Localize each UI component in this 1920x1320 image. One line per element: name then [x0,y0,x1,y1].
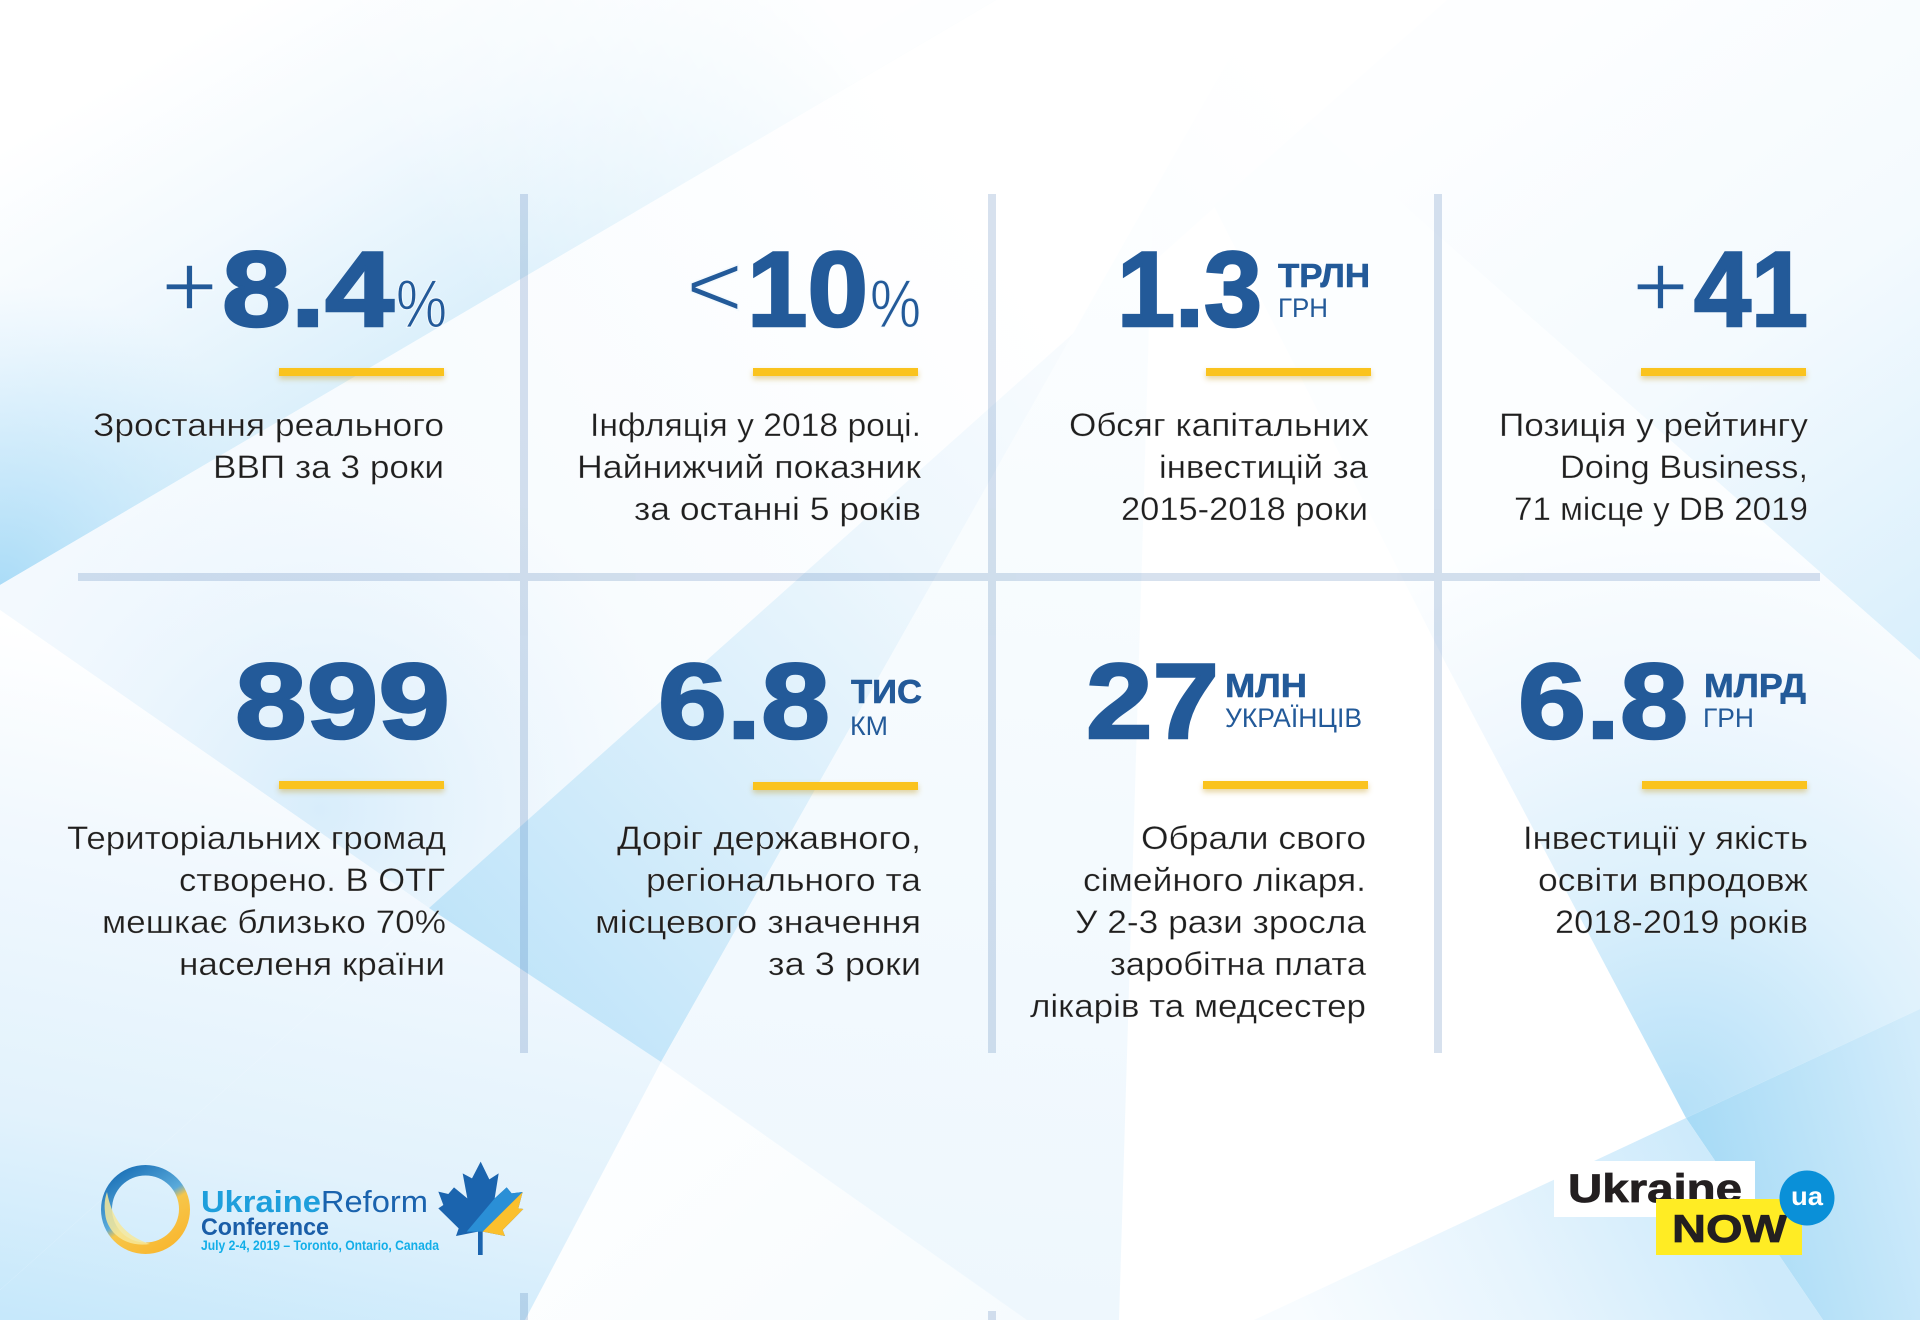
stat: +8.4%: 8.4 [222,229,394,349]
description: створено. В ОТГ [179,862,445,898]
description: Обрали свого [1141,820,1366,856]
description: Інфляція у 2018 році. [590,407,921,443]
panel: capital investment [1069,229,1371,527]
NOW text: NOW [1672,1208,1787,1251]
description: Doing Business, [1560,449,1808,485]
accent bar [279,368,444,376]
unit: million Ukrainians: МЛН [1225,667,1307,704]
description: сімейного лікаря. [1083,862,1366,898]
logo: Ukraine Now [1554,1161,1834,1255]
stat: +8.4% [161,229,447,349]
description [1030,820,1366,1024]
description: мешкає близько 70% [102,904,446,940]
description: лікарів та медсестер [1030,988,1366,1024]
unit: trillion hryvnia [1278,257,1370,323]
description [577,407,922,527]
unit: trillion hryvnia: ГРН [1278,293,1328,323]
description [93,407,444,485]
description: Обсяг капітальних [1069,407,1369,443]
unit: thousand km: КМ [850,711,888,741]
accent bar [1641,368,1806,376]
unit: billion hryvnia [1703,667,1806,733]
stat: +8.4%: + [161,237,218,337]
stat: 27: 27 [1086,641,1219,761]
description: Територіальних громад [67,820,446,856]
description: місцевого значення [595,904,921,940]
description: за останні 5 років [634,491,921,527]
white label [1554,1161,1755,1217]
description [1069,407,1369,527]
stat: <10% [686,229,921,349]
stat: 6.8: 6.8 [1518,641,1688,761]
accent bar [753,368,918,376]
accent bar [1203,781,1368,789]
grid dividers [78,194,1820,1320]
accent bar [1206,368,1371,376]
description: заробітна плата [1110,946,1366,982]
description: ВВП за 3 роки [213,449,444,485]
description: Зростання реального [93,407,444,443]
panel: roads [595,641,922,982]
ua badge: ua [1791,1181,1824,1211]
stat: <10%: 10 [747,229,868,349]
unit: million Ukrainians [1225,667,1362,733]
description: Найнижчий показник [577,449,922,485]
unit: billion hryvnia: МЛРД [1704,667,1806,704]
stat: +8.4%: % [396,266,447,342]
stat: <10%: % [870,266,921,342]
description [67,820,446,982]
icon: ring [101,1165,190,1254]
description [1523,820,1809,940]
unit: thousand km [850,673,922,741]
wordmark: Conference [201,1214,329,1241]
description [1499,407,1808,527]
wordmark: UkraineReform [201,1184,428,1219]
description: Інвестиції у якість [1523,820,1808,856]
accent bar [753,782,918,790]
Ukraine text: Ukraine [1568,1167,1742,1211]
description: населеня країни [179,946,445,982]
description: інвестицій за [1159,449,1368,485]
stat: 1.3: 1.3 [1117,229,1262,349]
stat: <10%: < [686,237,743,337]
panel: real GDP growth [93,229,447,485]
description: за 3 роки [768,946,921,982]
logo: Ukraine Reform Conference [101,1162,523,1255]
description: У 2-3 рази зросла [1075,904,1366,940]
description: Доріг державного, [617,820,921,856]
description: 2015-2018 роки [1121,491,1368,527]
unit: trillion hryvnia: ТРЛН [1278,257,1370,294]
accent bar [1642,781,1807,789]
accent bar [279,781,444,789]
stat: 6.8: 6.8 [658,641,830,761]
description [595,820,921,982]
wordmark [201,1184,439,1253]
stat: +41 [1632,229,1808,349]
description: Позиція у рейтингу [1499,407,1808,443]
panel: education investment [1518,641,1809,940]
panel: family doctors [1030,641,1368,1024]
unit: billion hryvnia: ГРН [1703,703,1754,733]
stat: +41: 41 [1694,229,1808,349]
description: регіонального та [646,862,921,898]
stat: 899: 899 [235,641,450,761]
description: освіти впродовж [1538,862,1809,898]
stat: +41: + [1632,237,1689,337]
description: 71 місце у DB 2019 [1514,491,1808,527]
wordmark: July 2-4, 2019 – Toronto, Ontario, Canada [201,1238,439,1253]
panel: territorial communities [67,641,450,982]
yellow label [1656,1199,1802,1255]
icon: maple leaf [438,1162,523,1255]
unit: million Ukrainians: УКРАЇНЦІВ [1225,703,1362,733]
description: 2018-2019 років [1555,904,1808,940]
unit: thousand km: ТИС [851,673,922,710]
ua badge [1780,1170,1834,1226]
panel: Doing Business rank [1499,229,1808,527]
panel: inflation [577,229,922,527]
